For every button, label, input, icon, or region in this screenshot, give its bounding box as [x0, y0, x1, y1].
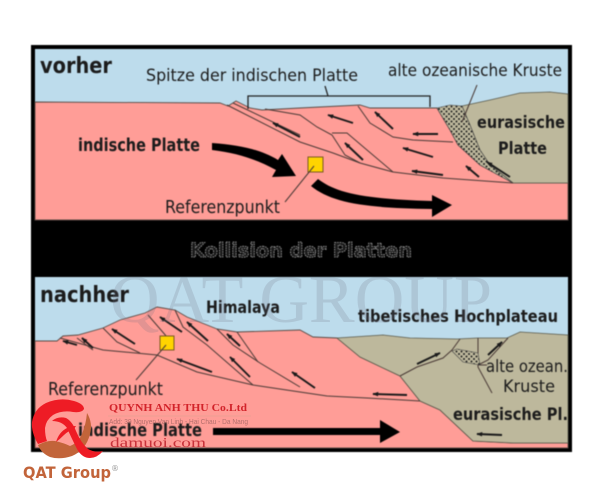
old oceanic crust — [437, 105, 513, 183]
label: indische Platte: indische Platte — [78, 421, 202, 441]
label: eurasische: eurasische — [477, 113, 565, 133]
big arrow: plate motion 2 — [311, 179, 452, 217]
fault lines — [60, 310, 508, 401]
divider under company name — [108, 415, 251, 417]
diagram frame — [31, 45, 572, 452]
label: Referenzpunkt: Referenzpunkt — [48, 380, 163, 400]
icon: yellow reference point — [285, 157, 323, 202]
tectonic movement arrows — [273, 112, 510, 177]
label: indische Platte: indische Platte — [78, 136, 200, 156]
registered mark: ® — [111, 464, 119, 473]
tectonic movement arrows — [63, 317, 502, 435]
indian plate — [35, 307, 568, 448]
label: Platte: Platte — [498, 139, 547, 159]
panel: vorher — [35, 49, 568, 220]
company name: QUYNH ANH THU Co.Ltd — [109, 403, 247, 414]
logo red accent stroke — [56, 426, 76, 442]
eurasian plate — [462, 92, 568, 183]
watermark: QAT GROUP: QAT GROUP — [110, 261, 492, 337]
icon: yellow reference point — [136, 336, 174, 380]
label: alte ozeanische Kruste: alte ozeanische Kruste — [388, 61, 562, 80]
big arrow: plate motion 1 — [212, 143, 296, 177]
label: Spitze der indischen Platte: Spitze der indischen Platte — [146, 66, 358, 85]
label: vorher: vorher — [40, 54, 112, 79]
panel: nachher — [35, 277, 568, 448]
label: nachher: nachher — [40, 283, 129, 308]
label: Kruste: Kruste — [503, 377, 555, 396]
label: Himalaya: Himalaya — [206, 298, 280, 318]
sky — [35, 277, 568, 448]
eurasian plate — [337, 332, 568, 443]
label: Referenzpunkt: Referenzpunkt — [165, 198, 280, 218]
bracket: Spitze der indischen Platte — [248, 86, 430, 109]
indian plate — [35, 101, 568, 220]
label: alte ozean.: alte ozean. — [486, 357, 568, 376]
label: tibetisches Hochplateau: tibetisches Hochplateau — [358, 307, 558, 327]
fault lines — [227, 85, 513, 183]
brand name: QAT Group — [23, 463, 111, 482]
logo red arc — [32, 399, 84, 444]
old oceanic crust remnant — [452, 349, 480, 365]
label: eurasische Pl.: eurasische Pl. — [453, 405, 568, 425]
logo brown crescent — [38, 413, 91, 458]
company address: Add: 39 Nguyen Van Linh - Hai Chau - Da Nang — [109, 417, 248, 426]
logo red tail — [52, 417, 103, 458]
logo: QAT Group — [23, 399, 251, 482]
sky — [35, 49, 568, 220]
big arrow: plate motion — [213, 420, 400, 443]
website: damuoi.com — [110, 436, 206, 451]
heading: Kollision der Platten: Kollision der Platten — [190, 239, 412, 262]
